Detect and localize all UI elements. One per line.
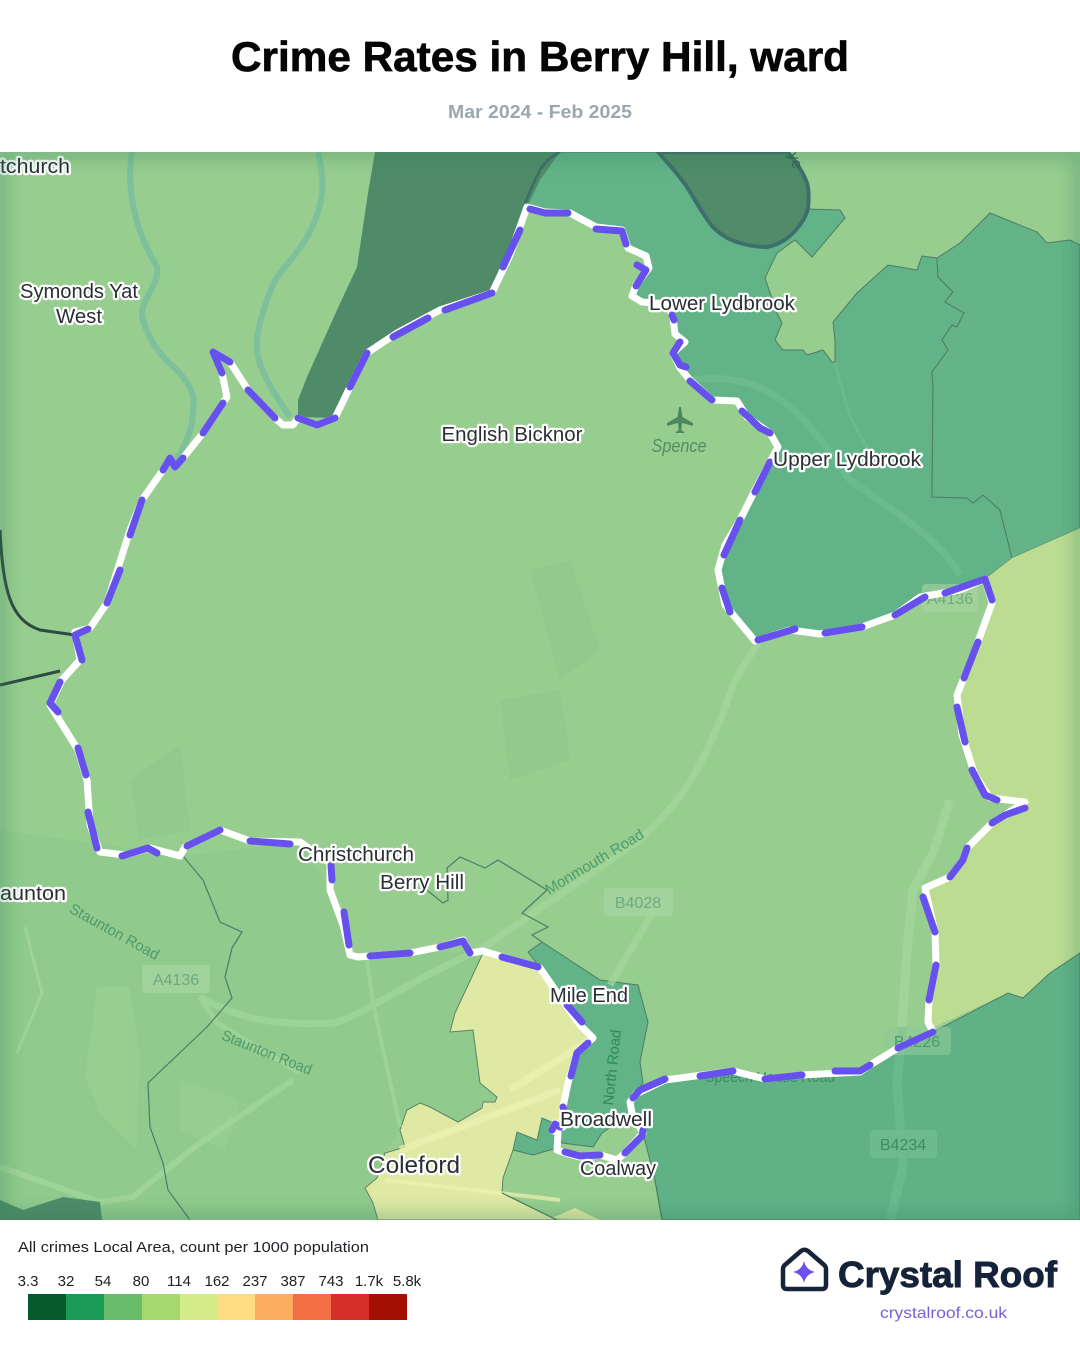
road label: North Road: North Road [600,1029,625,1106]
legend scale values: 387 [280,1273,306,1290]
road label: Monmouth Road: Monmouth Road [542,826,647,898]
region: yellow Coleford [365,953,593,1220]
logo wordmark: Crystal Roof [838,1254,1058,1295]
title: Crime Rates in Berry Hill, ward [231,33,849,80]
legend scale values: 743 [318,1273,344,1290]
place label: English Bicknor: English Bicknor [442,424,583,446]
icon: airfield plane at Spence [667,407,693,433]
boundary purple dashes [50,209,1025,1156]
boundary white base line [50,207,1025,1160]
river label: Wye: ye [785,150,806,171]
roads [0,363,960,1220]
legend scale values: 80 [133,1273,149,1290]
road shield: B4234: B4234 [880,1137,926,1154]
place label: Upper Lydbrook: Upper Lydbrook [773,449,922,471]
website link text: crystalroof.co.uk [880,1305,1008,1322]
legend scale values: 5.8k [393,1273,422,1290]
legend colour bar [28,1294,407,1320]
road shield: B4028 [604,888,673,916]
legend scale values: 114 [167,1273,191,1290]
legend scale values [18,1273,422,1290]
region: mid-green Mile End [528,942,648,1147]
place label: Symonds Yat West: West [56,306,102,328]
legend scale values: 32 [58,1273,74,1290]
region: mid-green north Lydbrook [527,152,1012,641]
legend [18,1239,422,1320]
legend scale values: 162 [204,1273,230,1290]
place label: Coalway: Coalway [580,1158,656,1180]
road shield: A4136 east [922,584,978,612]
region: yellow-green east [925,528,1080,1030]
place label: Mile End: Mile End [550,985,628,1007]
road shield: A4136 west [142,965,210,993]
date range subtitle: Mar 2024 - Feb 2025 [448,102,632,122]
place label: aunton: aunton [0,883,66,905]
road label: Staunton Road upper: Staunton Road [66,900,162,964]
place label: Spence: Spence [652,436,706,456]
road label: Staunton Road lower: Staunton Road [219,1027,314,1079]
place label: Coleford: Coleford [368,1152,460,1179]
region: dark forest west of river [298,152,560,418]
road label: Speech House Road: Speech House Road [705,1069,835,1086]
road shield: B4226 [894,1027,951,1055]
legend scale values: 237 [242,1273,268,1290]
region: small mid-green Coalway west [513,1118,557,1155]
legend scale values: 1.7k [355,1273,384,1290]
railway and A-road lines far left [0,530,75,685]
icon: house with star [783,1250,826,1289]
place label: tchurch: tchurch [0,156,70,178]
region: mid-green south-east [632,953,1080,1220]
ward boundary [50,207,1025,1160]
road shield: B4234 [870,1130,937,1158]
rivers and water [130,152,323,463]
place label: Broadwell: Broadwell [560,1109,652,1131]
road shield: B4226: B4226 [894,1034,940,1051]
road shield: B4028: B4028 [615,895,661,912]
legend scale values: 3.3 [18,1273,38,1290]
logo: Crystal Roof [783,1250,1058,1322]
place label: Berry Hill: Berry Hill [380,872,464,894]
map panel [0,150,1080,1220]
legend scale values: 54 [95,1273,111,1290]
neighbourhood boundary lines [148,856,662,1220]
dark patch bottom left [0,1197,102,1220]
region: dark forest river bend [658,152,809,247]
place label: Symonds Yat West: Symonds Yat [20,281,138,303]
region: mid-green east [932,213,1080,558]
place label: Lower Lydbrook: Lower Lydbrook [649,293,796,315]
place label: Symonds Yat West [20,281,138,328]
place label: Christchurch: Christchurch [298,844,414,866]
road shield: A4136 west: A4136 [153,972,199,989]
legend title: All crimes Local Area, count per 1000 population [18,1239,369,1256]
road shield: A4136 east: A4136 [927,591,973,608]
